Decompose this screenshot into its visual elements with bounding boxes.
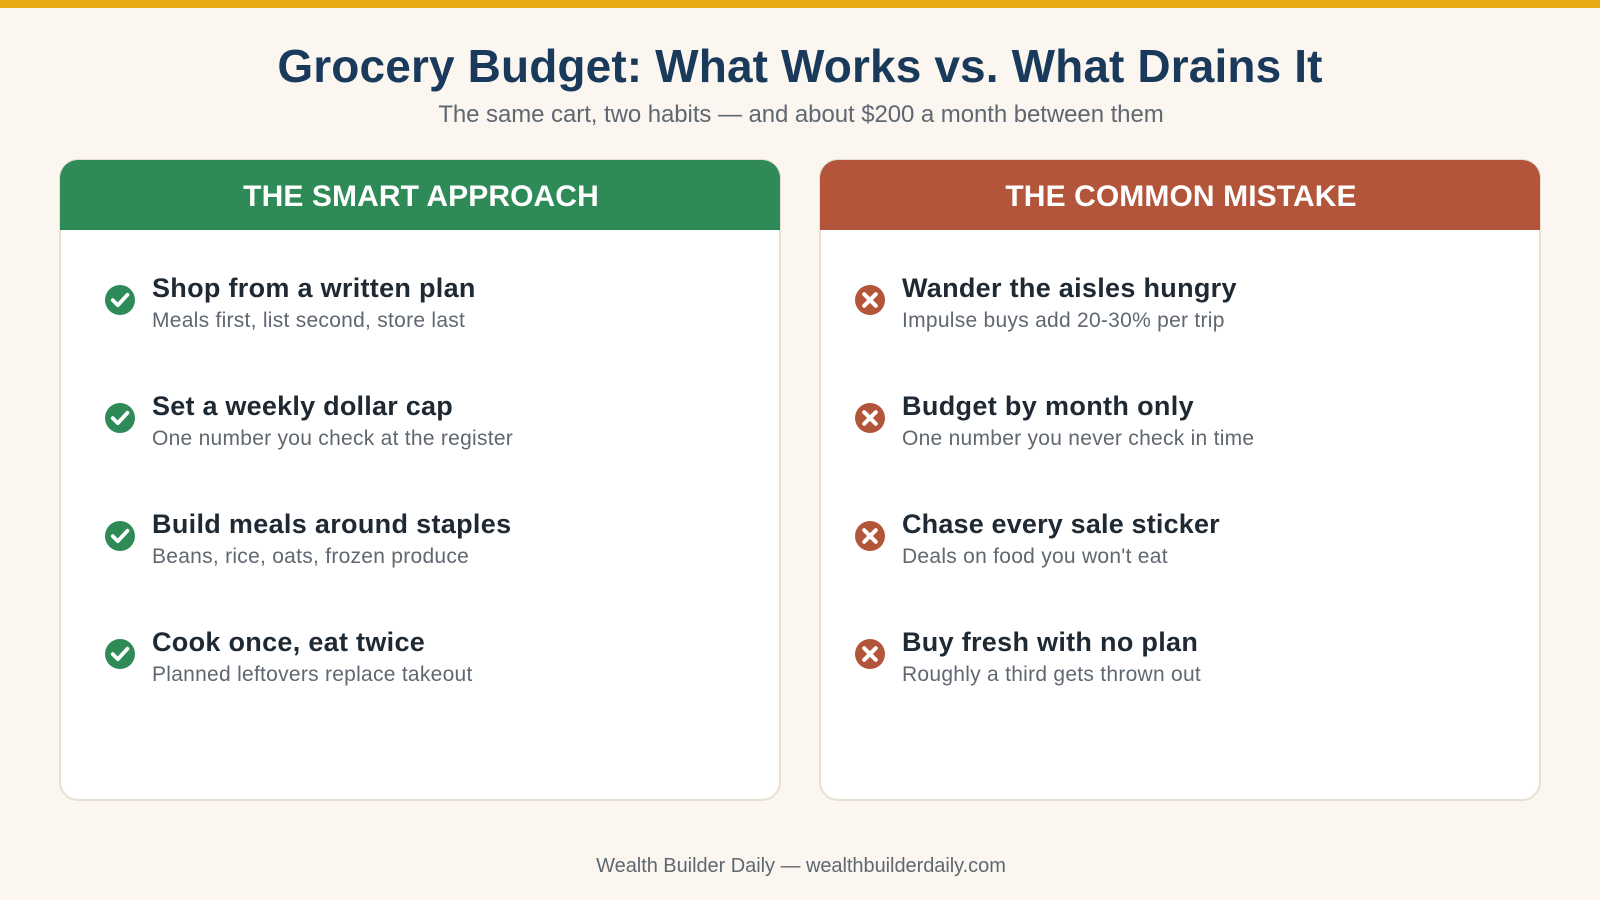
item: shop from a written plan: Meals first, list second, store last	[152, 309, 465, 332]
item: buy fresh with no plan: Buy fresh with no plan	[902, 627, 1198, 657]
item: budget by month only	[855, 391, 1254, 450]
top accent bar	[0, 0, 1600, 8]
item: set a weekly dollar cap: Set a weekly dollar cap	[152, 391, 453, 421]
panel: the smart approach	[59, 159, 781, 801]
item: wander the aisles hungry: Wander the aisles hungry	[902, 273, 1237, 303]
panel header: smart approach: THE SMART APPROACH	[243, 180, 599, 213]
item: build meals around staples: Build meals around staples	[152, 509, 511, 539]
item: shop from a written plan: Shop from a written plan	[152, 273, 476, 303]
item: chase every sale sticker: Deals on food you won't eat	[902, 545, 1168, 568]
panel: the common mistake	[819, 159, 1541, 801]
item: budget by month only: One number you never check in time	[902, 427, 1254, 450]
item: cook once, eat twice: Cook once, eat twice	[152, 627, 425, 657]
item: chase every sale sticker: Chase every sale sticker	[902, 509, 1220, 539]
item: set a weekly dollar cap	[105, 391, 513, 450]
footer: Wealth Builder Daily — wealthbuilderdaily.com	[596, 855, 1006, 877]
item: cook once, eat twice: Planned leftovers replace takeout	[152, 663, 473, 686]
item: buy fresh with no plan	[855, 627, 1201, 686]
item: cook once, eat twice	[105, 627, 473, 686]
subtitle: The same cart, two habits — and about $200 a month between them	[438, 101, 1164, 128]
item: chase every sale sticker	[855, 509, 1220, 568]
panel header: common mistake: THE COMMON MISTAKE	[1005, 180, 1357, 213]
panel header: common mistake	[820, 160, 1540, 230]
item: set a weekly dollar cap: One number you check at the register	[152, 427, 513, 450]
item: wander the aisles hungry	[855, 273, 1237, 332]
title: Grocery Budget: What Works vs. What Drains It	[277, 40, 1323, 92]
item: budget by month only: Budget by month only	[902, 391, 1194, 421]
item: build meals around staples	[105, 509, 511, 568]
item: wander the aisles hungry: Impulse buys add 20-30% per trip	[902, 309, 1225, 332]
item: buy fresh with no plan: Roughly a third gets thrown out	[902, 663, 1201, 686]
item: build meals around staples: Beans, rice, oats, frozen produce	[152, 545, 469, 568]
item: shop from a written plan	[105, 273, 476, 332]
panel header: smart approach	[60, 160, 780, 230]
